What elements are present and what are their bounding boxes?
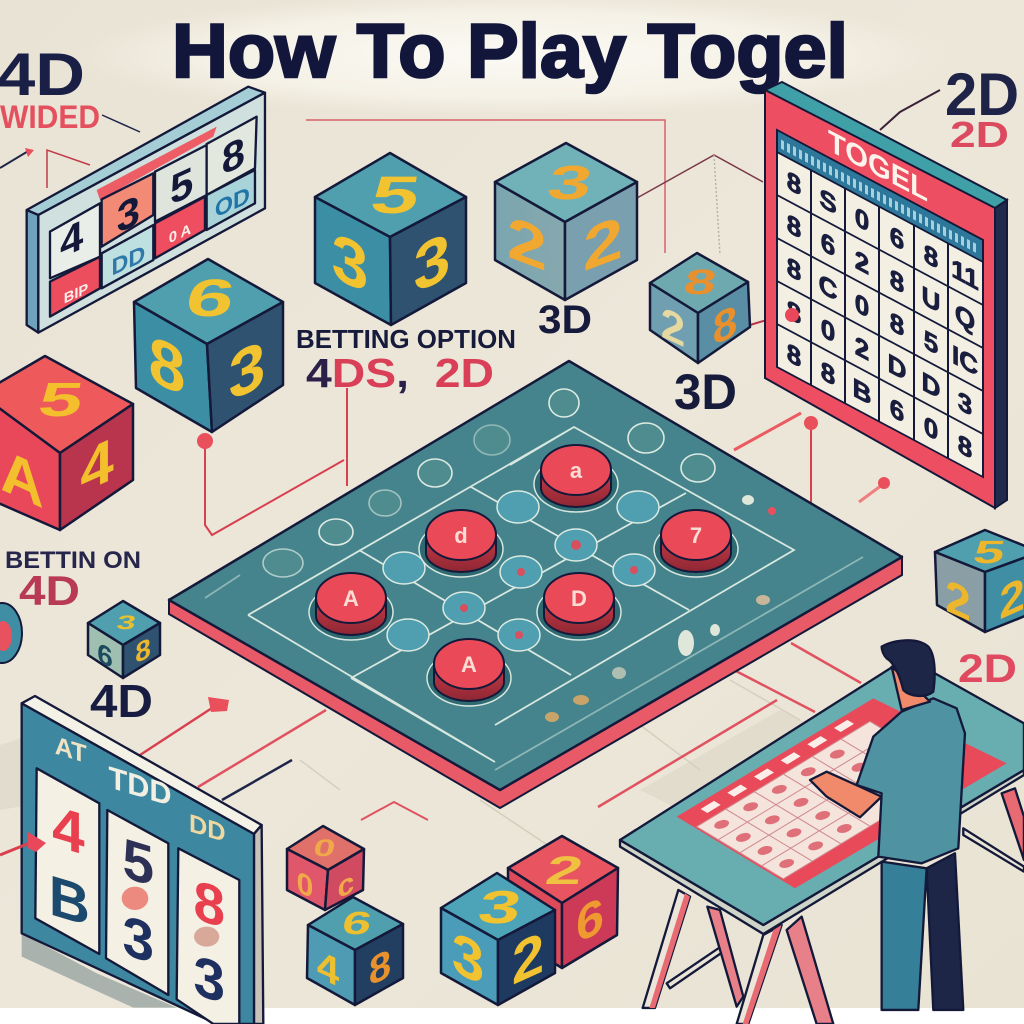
icon: small cube 4D [88,601,160,678]
board grid: 0 [855,201,869,238]
icon: cube teal 3 3 2: 3 [474,882,526,933]
icon: cube red top small [287,826,364,910]
board grid: S [819,182,837,220]
label: 2D red top right: 2D [950,114,1009,155]
board grid: 6 [821,226,835,263]
board grid: 8 [924,238,938,275]
person pants [882,862,927,1010]
pale board marks [545,495,776,722]
board grid: 8 [787,165,801,202]
panel: 4D display monitor: 8 [222,128,245,185]
icon: cube right edge [935,530,1024,632]
label: betting option: BETTING OPTION [296,324,516,354]
red buttons: a [570,458,583,483]
red buttons: A [343,586,359,611]
red buttons: 7 [690,523,702,548]
board grid: 11 [951,253,979,296]
icon: cube right edge: 2 [945,569,971,632]
icon: grey-teal cube 3 2 2: 3 [543,155,597,209]
panel: bottom left result board: 3 [194,944,225,1016]
icon: cube red top small: 0 [311,835,338,861]
label: 3D right: 3D [674,364,737,420]
board grid: 8 [821,355,835,392]
label: 2D red right: 2D [958,647,1017,691]
panel: bottom left result board: TDD [108,760,171,813]
panel: 4D display monitor: 3 [117,186,140,243]
panel: 4D display monitor: OD [215,182,250,224]
panel: bottom left result board: 8 [194,869,225,941]
icon: small cube 4D: 6 [97,637,113,675]
icon: cube right edge: 5 [970,534,1009,570]
icon: red cube left: 5 [34,372,88,426]
icon: teal cube 5 3 3: 3 [332,217,368,308]
board grid: 0 [924,410,938,447]
table top [620,770,1024,934]
rim icons [263,389,715,577]
board grid: 0 [821,312,835,349]
board grid: 2 [855,244,869,281]
board grid: U [922,280,940,319]
panel: betting board [169,361,902,808]
panel: 4D display monitor: BIP [64,280,88,308]
icon: cube teal 3 3 2 [441,873,555,1005]
board grid: B [853,372,871,411]
board grid: 3 [958,385,972,422]
icon: cube red 2 6: 6 [576,887,604,955]
board grid: 8 [787,208,801,245]
icon: cube red top small: c [338,865,354,905]
red buttons [309,445,738,706]
red buttons: D [571,586,587,611]
board grid: C [819,268,837,307]
panel: bottom left result board [22,696,263,1024]
board grid: D [922,366,940,405]
icon: teal cube 6 8 3 [134,259,283,432]
icon: partial cube left edge [0,603,22,663]
person shirt [857,698,965,863]
board grid: 6 [890,392,904,429]
icon: grey-teal cube 3 2 2: 2 [507,203,547,285]
red marker on board [785,308,799,322]
pointer on result board [0,832,46,855]
person neck [892,667,930,710]
icon: cube red 2 6: 2 [542,849,587,893]
panel: 4D display monitor: 5 [170,158,193,215]
icon: red cube left [0,356,133,530]
board grid: 2 [855,330,869,367]
table legs [643,788,1024,1024]
icon: red cube left: 4 [80,425,114,507]
icon: grey-teal cube 3 2 2: 2 [583,203,623,285]
board grid: 8 [787,251,801,288]
icon: small cube right: 2 [661,296,685,357]
icon: small cube right [650,253,750,363]
icon: cube teal bottom: 6 [339,906,375,941]
icon: red cube left: A [0,436,44,522]
label: 3D above: 3D [538,298,592,342]
board grid [777,130,983,477]
betting sheet [677,698,1007,888]
board grid: 5 [924,324,938,361]
panel: 4D display monitor: DD [111,241,145,282]
title: How To Play Togel [172,9,848,94]
icon: small cube right: 8 [681,263,720,302]
connector lines [0,90,940,820]
board grid: 8 [787,337,801,374]
board grid: D [888,348,906,387]
label: 4D red: 4D [19,567,80,614]
board grid: 8 [890,306,904,343]
icon: cube red 2 6 [508,836,618,968]
board grid: 0 [855,287,869,324]
icon: teal cube 6 8 3: 3 [229,325,265,416]
board grid: Q [955,298,975,337]
small chips [383,491,659,651]
panel: 4D display monitor: 0 A [169,221,191,247]
label: 4DS, 2D: 4DS, 2D [306,350,494,396]
icon: teal cube 5 3 3 [315,153,466,325]
panel: bottom left result board: 4 [52,792,85,868]
panel: bottom left result board: 5 [123,827,154,899]
label: betting on: BETTIN ON [5,547,141,574]
panel: Togel number board [765,82,1007,508]
board grid: 6 [890,220,904,257]
label: 4D lower: 4D [90,675,153,727]
board grid: 8 [787,294,801,331]
red buttons: d [454,523,468,548]
board grid: IC [952,339,978,382]
panel: 4D display monitor: 4 [60,211,84,268]
panel: bottom left result board: B [49,864,90,939]
label: WIDED: WIDED [0,99,100,135]
icon: cube teal bottom: 4 [317,941,340,996]
icon: grey-teal cube 3 2 2 [495,143,637,300]
icon: teal cube 5 3 3: 5 [366,166,425,225]
icon: teal cube 5 3 3: 3 [414,217,450,308]
icon: small cube 4D: 3 [115,611,138,633]
panel: bottom left result board: AT [55,732,87,769]
icon: cube teal bottom: 8 [369,940,391,995]
board grid: 8 [890,263,904,300]
board heading: TOGEL: TOGEL [828,123,928,209]
icon: small cube right: 8 [713,294,737,355]
person arm [810,772,882,817]
icon: teal cube 6 8 3: 8 [149,320,185,411]
panel: bottom left result board: DD [189,810,226,848]
icon: small cube 4D: 8 [135,632,151,670]
icon: teal cube 6 8 3: 6 [181,269,240,328]
board grid: 8 [958,428,972,465]
panel: 4D display monitor [27,87,265,333]
icon: cube teal bottom [307,897,403,1005]
person hair [882,640,935,696]
pins on connectors [25,148,890,712]
panel: person at table [620,640,1024,1024]
icon: cube teal 3 3 2: 2 [512,918,544,998]
red buttons: A [461,652,477,677]
board lines [205,427,863,770]
label: 2D top right: 2D [945,61,1019,128]
icon: cube red top small: 0 [297,865,313,905]
panel: bottom left result board: 3 [123,904,154,976]
icon: cube teal 3 3 2: 3 [452,918,484,998]
